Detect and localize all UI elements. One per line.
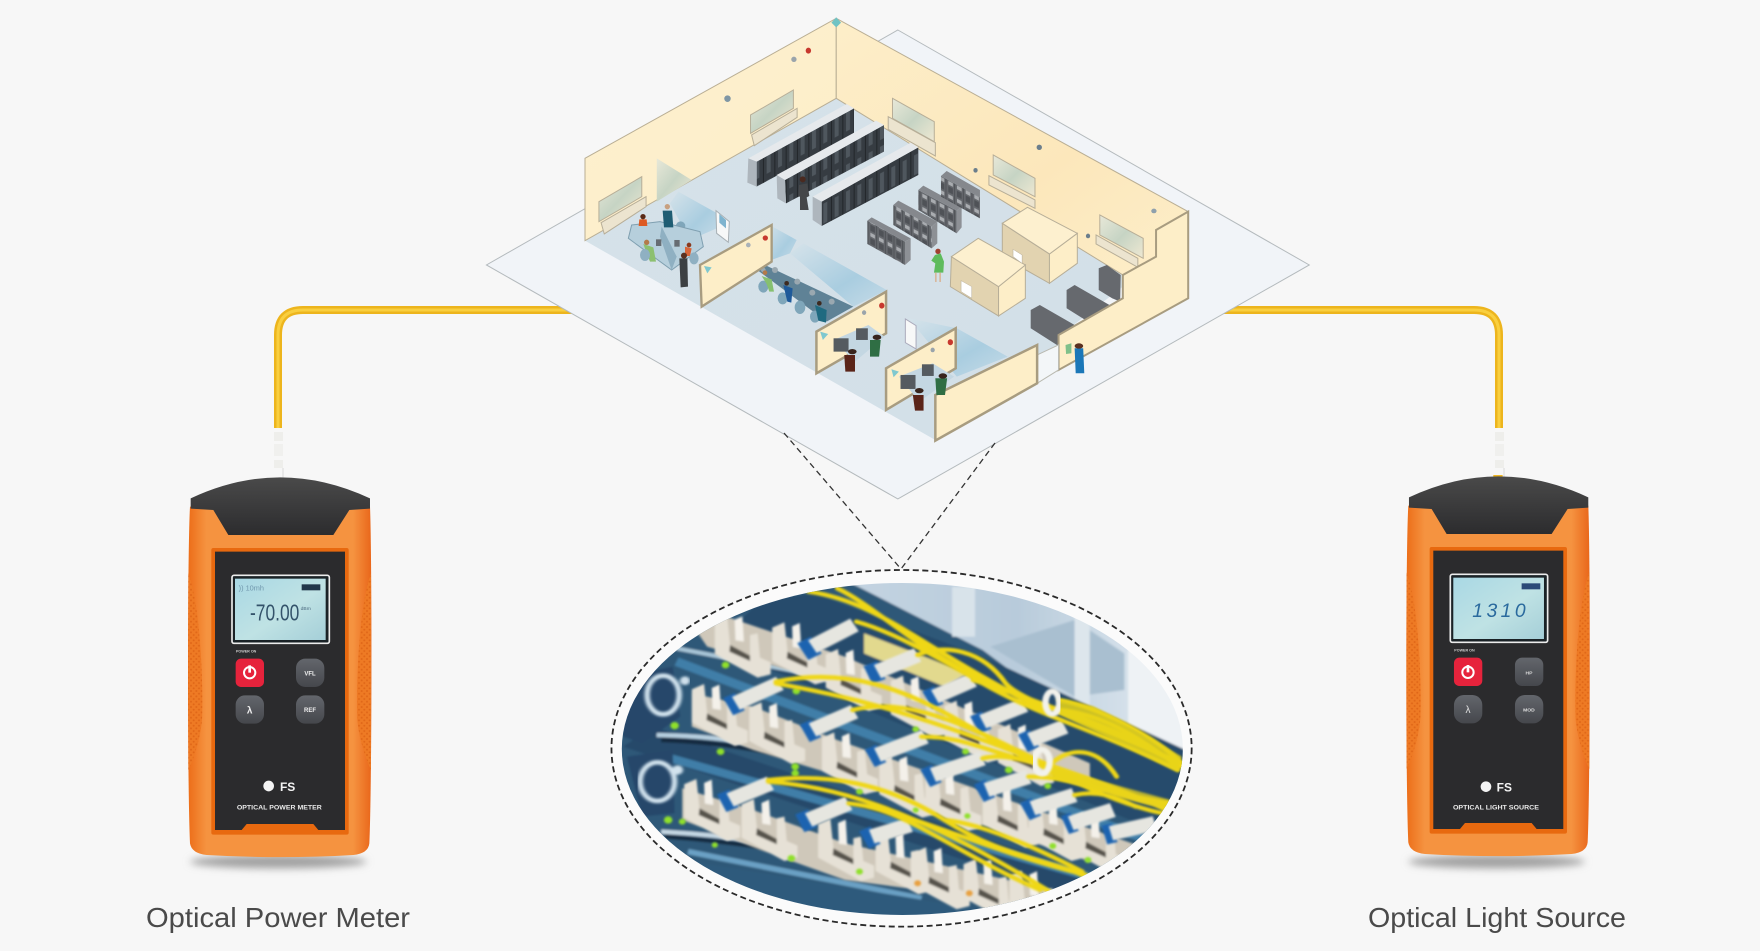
REF button (296, 695, 324, 724)
yellow fibre patch cords (768, 588, 1182, 892)
device name: OPTICAL POWER METER (237, 804, 322, 811)
HP button: HP (1525, 670, 1533, 676)
dashed zoom lines (784, 433, 995, 569)
lcd reading: -70.00 (250, 600, 299, 626)
FS logo (263, 780, 295, 794)
control desk with operators (755, 265, 853, 323)
FS logo: FS (280, 780, 295, 794)
cabinet group four (941, 171, 980, 218)
port rows (682, 616, 1151, 933)
partition wall one (700, 225, 772, 307)
corridor floor shading (670, 192, 887, 307)
lambda button (236, 695, 264, 724)
button labels: POWER ON (236, 650, 257, 654)
FS logo: FS (1497, 781, 1512, 795)
cabinet group one (867, 217, 911, 265)
orange housing (1406, 506, 1590, 856)
power button (236, 659, 264, 687)
meeting table group (628, 204, 703, 287)
top connector (1493, 475, 1503, 478)
lambda button (1454, 695, 1482, 723)
control room two equipment (899, 363, 954, 411)
top cap (1409, 476, 1588, 534)
staff member in blue (1066, 343, 1084, 373)
right yellow fibre cable (1190, 310, 1505, 480)
partition wall two (816, 292, 886, 373)
swirl panel labels (640, 676, 687, 801)
white door two (905, 319, 916, 349)
lcd top status: )) 10mh (239, 584, 264, 593)
HP button (1515, 658, 1543, 686)
front right wall (1059, 212, 1188, 370)
blue connector boots (722, 645, 1115, 840)
lambda button: λ (247, 705, 253, 716)
staff member in green (931, 249, 944, 282)
cabinet group two (893, 201, 937, 248)
battery icon (302, 584, 320, 590)
label: optical power meter: Optical Power Meter (146, 902, 410, 933)
lambda button: λ (1465, 705, 1470, 716)
enclosure boxes (950, 207, 1077, 316)
label: optical light source: Optical Light Source (1368, 902, 1626, 933)
front bezel (211, 548, 349, 835)
orange housing (188, 507, 371, 857)
room floor (585, 98, 1156, 441)
front bezel (1430, 547, 1567, 834)
wall sensors (724, 48, 1157, 238)
ceiling marker (831, 17, 841, 27)
power button (1454, 658, 1482, 686)
control room one equipment (834, 325, 884, 372)
side grips (1407, 572, 1589, 769)
VFL button (296, 659, 324, 687)
device shadow (1408, 855, 1585, 868)
far corridor shading (909, 318, 1008, 377)
office and control desk area (628, 204, 853, 323)
MOD button (1515, 695, 1543, 723)
front wall (935, 345, 1037, 441)
optical power meter device (188, 477, 371, 868)
photo content (615, 580, 1189, 933)
battery icon (1522, 583, 1540, 589)
lcd reading: 1310 (1472, 601, 1526, 622)
entrance door (1037, 345, 1059, 383)
long rack row three (813, 143, 918, 226)
staff member in grey (798, 176, 809, 210)
white door (716, 211, 729, 242)
data center floor plan illustration (486, 17, 1309, 499)
lcd screen (232, 575, 329, 643)
device name: OPTICAL LIGHT SOURCE (1453, 805, 1540, 812)
dashed ellipse outline (611, 570, 1192, 927)
optical light source device (1406, 475, 1590, 868)
cabinet group three (918, 186, 962, 233)
white connectors (730, 625, 1155, 837)
wall windows and cooling units (599, 90, 1143, 267)
lcd unit: dBm (301, 606, 311, 612)
back right wall (836, 18, 1188, 275)
cable bundle ends (1044, 700, 1182, 810)
floor plate (486, 30, 1309, 499)
button labels: POWER ON (1454, 649, 1475, 653)
lcd screen (1450, 574, 1548, 642)
fibre patch panel close-up photo (611, 570, 1192, 933)
left yellow fibre cable (274, 310, 600, 480)
FS logo (1481, 781, 1512, 795)
black front panel (215, 552, 345, 830)
REF button: REF (304, 708, 316, 714)
partition wall three (886, 328, 956, 410)
side grips (188, 573, 371, 770)
white cable ties (1034, 691, 1059, 774)
right cabinets (1031, 265, 1121, 346)
back left wall (585, 18, 836, 241)
long rack row one (747, 104, 854, 187)
top cap (191, 477, 370, 535)
VFL button: VFL (304, 671, 316, 677)
room shell (486, 17, 1309, 499)
status LEDs (664, 662, 1091, 896)
MOD button: MOD (1523, 707, 1535, 713)
partition markers (820, 303, 953, 377)
server racks and cabinets (747, 104, 980, 282)
black front panel (1433, 551, 1563, 829)
long rack row two (777, 121, 884, 203)
enclosures and front walls (816, 207, 1188, 441)
device shadow (190, 855, 367, 868)
